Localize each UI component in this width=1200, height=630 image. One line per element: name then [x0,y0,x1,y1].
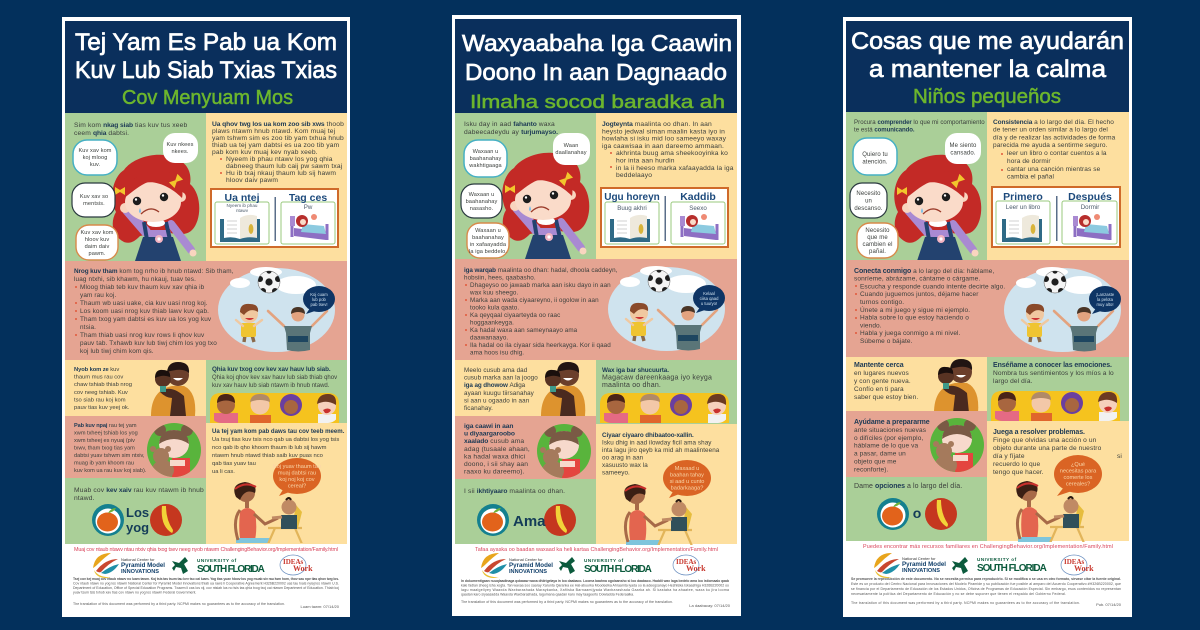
panel: understand behaviour: te está comunicando. [854,127,914,134]
panel: emotions: maalinta oo dhan. [602,382,661,389]
panel: consistency: leer un libro o contar cuentos a la [1007,150,1107,157]
footer: links, logos, credits: lagu maalgeliyey Waaxda Waxbarashada Maraykanka, Xafiiska Barnaamijyada Waxbarashada Gaarka ah. Si kastaba ha ahaatee, waxa ku jira looma [461,588,729,592]
panel: consistency: hora de dormir [1007,158,1051,165]
panel: connect: muy alto! [1096,302,1114,307]
panel: connect: ciisa qaad [700,296,719,301]
panel: understand behaviour: nasasho. [470,206,494,212]
panel: choices [65,478,206,544]
footer: links, logos, credits: La daabacay: 07/14/20 [689,603,731,608]
panel: problem solving: si [1117,453,1122,460]
panel: emotions [206,360,347,425]
footer: links, logos, credits: Tsej cov kej muaj cov ntaub ntawv no luam tawm. Koj tsis tas tsum tau kev tso cai luam. Yog tias yuav hloov los yog muab siv rau lwm hom, thov sau npe tias qhov twg los. [73,577,339,581]
panel: emotions: Magacaw dareenkaaga iyo keyga [602,374,712,382]
panel: stay close: ficanahay. [464,405,493,412]
footer: links, logos, credits: SOUTH FLORIDA [977,563,1047,574]
panel: problem solving: cereales? [1066,482,1090,488]
panel: connect: Tham thiab uasi nrog kuv rows li qhov kuv [80,332,205,339]
panel: connect: Escucha y responde cuando intente decirte algo. [860,283,1005,290]
schedule card: Ugu horeyn [604,192,660,203]
footer: links, logos, credits: SOUTH FLORIDA [584,564,652,575]
panel: connect: luag ntxhi, sib khawm, hu nkauj, tuav tes. [74,276,196,283]
panel: understand behaviour: dabeecadeydu ay turjumayso. [464,129,558,136]
panel: stay close [846,357,987,413]
footer: links, logos, credits: UNIVERSITY of [584,558,624,563]
footer: links, logos, credits: National Center for [121,557,155,562]
panel: stay close: cov neeg tshiab. Kuv [74,390,128,396]
panel: consistency: cambia el pañal [1007,174,1054,180]
panel: consistency: Hu ib txaj nkauj thaum lub sij hawm [226,170,336,177]
panel: consistency: hloov daiv pawm [226,177,278,184]
footer: links, logos, credits: Se promueve la reproducción de este documento. No se necesita permiso para reproducirlo. Si se modifica o se usa en otro formato, sírvase citar la fuente original. [851,577,1121,581]
panel: consistency: in la ii heeso marka xafaayadda la iga [616,165,734,172]
schedule card: Ua ntej [224,192,260,204]
panel: understand behaviour: Waan [564,143,578,149]
panel: connect: Habla sobre lo que estoy haciendo o [860,315,969,322]
panel: connect: Súbeme o bájate. [860,338,913,345]
footer: links, logos, credits: Luam tawm: 07/14/20 [301,604,340,609]
footer: links, logos, credits: UNIVERSITY of [977,557,1017,562]
footer: links, logos, credits: kale fadlan sheeg isha xogta. Tan waxaa soo saaray Xarunta Qaranka ee Hal-abuurka Moodeelka Ahraamta iyada oo la adeegsanayo Heshiiska Iskaashiga H326B220002 oo [461,584,729,588]
panel: problem solving [206,423,347,544]
panel: prepare me [846,411,987,477]
panel: understand behaviour: cansado. [950,150,976,156]
panel: connect: ntsia. [80,324,96,331]
panel: prepare me [65,416,206,480]
panel: understand behaviour: un [865,198,872,204]
panel: consistency: plaws ntawm hnub ntawd. Kom muaj tej [212,128,336,135]
header: Hmong title [65,21,347,113]
panel: consistency: akhrinta buug ama sheekooyinka ko [616,150,728,157]
schedule card: Leer un libro [1006,204,1041,211]
panel: connect [455,259,737,360]
panel: connect: yam rau koj. [80,292,116,299]
panel: problem solving: Koj yuav thaum tau [273,464,321,470]
panel: understand behaviour: Procura comprender lo que mi comportamiento [854,119,985,126]
header: Somali title [455,19,737,113]
panel: stay close: chaw tshiab thiab nrog [74,382,132,388]
panel: problem solving: Finge que olvidas una acción o un [993,437,1097,444]
panel: connect: lub pob [312,297,327,302]
panel: problem solving: cereal? [288,484,306,490]
panel: consistency: iga caawisaa in aan dareemo ammaan. [602,143,724,150]
panel: emotions: Nombra tus sentimientos y los míos a lo [993,370,1114,377]
panel: connect: Mloog thiab teb kuv thaum kuv xav qhia ib [80,284,205,291]
panel: problem solving: día y fíjate [993,453,1025,460]
panel: connect: hobsiin, hees, qaabasho. [464,274,536,282]
panel: problem solving: baahan tahay [670,472,704,478]
panel: choices: o [913,505,921,521]
panel: choices: Los [126,505,149,520]
footer: links, logos, credits: The translation of this document was performed by a third party. NCPMI makes no guarantees as to the accuracy of the translation. [851,601,1080,605]
panel: connect: sonríeme, abrázame, cántame o cárgame. [854,276,980,283]
panel: prepare me: Ayúdame a prepararme [854,419,930,426]
panel: connect: pauv tab. Txhawb kuv lub tiwj chim los yog txo [80,340,217,347]
panel: consistency [987,112,1129,260]
panel: problem solving: ¿Qué [1071,462,1085,468]
panel: prepare me: doono, i sii shay aan [464,461,528,468]
panel: connect: Ka hadal waxa aan sameynaayo ama [470,327,578,334]
footer: links, logos, credits: UNIVERSITY of [197,558,237,563]
panel: emotions [987,357,1129,423]
panel: connect: Koj cuam [310,292,328,297]
panel: understand behaviour: koj mloog [83,155,107,161]
panel: consistency: día y de realizar las actividades de forma [993,134,1116,141]
footer: links, logos, credits: Pyramid Model [902,561,946,568]
panel: emotions: largo del día. [993,378,1033,385]
panel: connect: Marka aan wada ciyaareyno, ii ogolow in aan [470,297,599,304]
panel: consistency [596,113,737,259]
panel: stay close: ayaan kuugu tiirsanahay [464,390,535,397]
panel: connect: pab tsev! [310,302,328,307]
panel: consistency: cantar una canción mientras se [1007,166,1101,173]
panel: prepare me: xwm txheej es nyuaj (piv [74,438,135,444]
panel: choices: yog [126,520,149,535]
panel: problem solving: comerte los [1064,475,1093,481]
panel: prepare me: adag (tusaale ahaan, [464,446,530,453]
panel: emotions: Wax iga bar shucuurta. [602,367,669,374]
panel: connect: iga warqab maalinta oo dhan: hadal, dhoola caddeyn, [464,267,617,274]
panel: understand behaviour [65,113,206,261]
panel: understand behaviour: que me [867,235,888,241]
panel: connect: Conecta conmigo a lo largo del día: háblame, [854,268,994,275]
footer: links, logos, credits: Muaj cov ntaub ntawv ntau ntxiv qhia txog tsev neeg nyob ntawm ChallengingBehavior.org/Implementation/Family.html [74,547,338,553]
panel: choices: ntawd. [74,495,95,502]
panel: prepare me: raaxo ku dareemo). [464,469,525,476]
panel: understand behaviour: Waxaan u [475,228,501,234]
panel: consistency: Nyeem ib phau ntawv los yog qhia [226,156,333,163]
panel: connect: ama hoos isu dhig. [470,350,524,356]
schedule card: Tag ces [289,192,327,204]
panel: understand behaviour: kuv. [90,162,100,168]
footer: links, logos, credits: Tafaa ayaska oo baadan waxaad ka heli kartaa ChallengingBehavior.org/Implementation/Family.html [475,547,718,553]
header: Somali title: Waxyaabaha Iga Caawin [462,30,732,56]
panel: problem solving: xasuusto wax la [602,462,648,469]
panel: connect [846,260,1129,357]
panel: stay close: cusub marka aan la joogo [464,375,538,382]
panel: connect: la pelota [1097,297,1114,302]
panel: stay close: Confío en ti para [854,386,904,393]
panel: problem solving [596,424,737,546]
panel: problem solving: ntawm hnub ntawd thiab saib kuv puas nco [212,453,323,459]
panel: stay close: Meelo cusub ama dad [464,367,527,374]
schedule card: ntawv [236,208,249,213]
panel: problem solving: qab tias yuav tau [212,461,256,467]
panel: consistency: yam tshwm sim es zoo tib yam txhua hnub [212,135,344,142]
panel: problem solving: Ua txuj tias kuv tsis nco qab ua dabtsi los yog tsis [212,437,339,443]
panel: understand behaviour: pawm. [89,251,106,257]
panel: connect: Ka qeyqaal ciyaarteyda oo raac [470,312,560,319]
footer: links, logos, credits: National Center for [902,556,936,561]
poster: Spanish [843,17,1132,617]
panel: problem solving: recuerdo lo que [993,461,1041,468]
panel: stay close: iga ag dhowow Adiga [464,382,525,389]
panel: prepare me: o difíciles (por ejemplo, [854,435,923,442]
footer: links, logos, credits: Work [1074,564,1094,573]
footer: links, logos, credits: INNOVATIONS [121,569,159,575]
panel: connect: turnos contigo. [860,299,904,306]
footer: links, logos, credits: yuav tsum tsis txhob xav tias cov ntawv no yog los ntawm Federal Government. [73,590,196,594]
panel: stay close: thaum mus rau cov [74,375,123,381]
footer: links, logos, credits: Department of Education, Office of Special Education Programs. Txawm li cas los xij, cov ntsiab lus no tsis tas qhia txog txoj cai ntawm Department of Education. Thiab koj [73,586,339,590]
panel: understand behaviour: pañal. [869,249,886,255]
panel: prepare me: u diyaargaroobo [464,431,515,438]
panel: problem solving: inta lagu jiro qeyb ka mid ah maalinteena [602,447,720,454]
panel: connect: Tham txog yam dabtsi es kuv ua los yog kuv [80,316,212,323]
header: Spanish title [846,21,1129,112]
panel: stay close: si aan u ogaado in aan [464,397,530,404]
panel: consistency: dabneeg thaum lub caij pw sawm txaj [226,163,343,170]
panel: prepare me: dabtsi yuav tshwm sim ntxiv, [74,453,145,459]
panel: prepare me [455,416,596,481]
panel: connect: viendo. [860,322,882,329]
panel: connect: Dhageyso oo jawaab marka aan isku dayo in aan [470,282,611,289]
panel: understand behaviour: cambien el [862,242,893,248]
schedule card: Seexo [689,205,707,212]
panel: problem solving: koj noj koj cov [279,477,315,483]
panel: problem solving: si aad u cunto [670,479,704,485]
panel: consistency: thiab ua tej yam dabtsi es ua zoo tib yam [212,142,340,149]
schedule card: Buug akhri [617,205,647,212]
panel: consistency: heysto jedwal siman maalin kasta iyo in [602,128,725,135]
panel: problem solving: necesitas para [1060,468,1097,474]
footer: links, logos, credits: IDEAs [283,558,304,566]
panel: problem solving: Isku dhig in aad ilowday ficil ama shay [602,440,712,446]
panel: connect [65,261,347,360]
schedule card: Nyeem ib phau [227,203,257,208]
schedule card: Pw [304,204,313,211]
panel: emotions: Qhia kuv txog cov kev xav hauv lub siab. [212,366,331,373]
footer: links, logos, credits: Work [293,564,313,573]
panel: understand behaviour [846,112,987,261]
panel: consistency: howlaha si isku mid loo sameeyo waxay [602,136,727,143]
panel: emotions: Qhia koj qhov kev xav hauv lub siab thiab qhov [212,375,337,381]
footer: links, logos, credits: INNOVATIONS [509,569,547,575]
footer: links, logos, credits [461,547,731,608]
footer: links, logos, credits: se financia por el Departamento de Educación de los Estados Unidos, Oficina de Programas de Educación Especial. Sin embargo, esos contenidos no representan [851,587,1121,591]
panel: consistency: Jogteynta maalinta oo dhan. In aan [602,121,712,128]
panel: problem solving: Juega a resolver problemas. [993,429,1085,436]
panel: understand behaviour: atención. [862,160,888,166]
panel: prepare me: ante situaciones nuevas [854,427,927,434]
panel: emotions [596,360,737,425]
panel: consistency: de tener un orden similar a lo largo del [993,127,1108,134]
footer: links, logos, credits: INNOVATIONS [902,568,940,574]
panel: connect: ¡Lanzaste [1096,292,1114,297]
panel: stay close: y con gente nueva. [854,378,911,385]
poster: Somali [452,15,741,616]
panel: problem solving: Maxaad u [675,466,699,472]
panel: stay close: en lugares nuevos [854,370,909,377]
panel: prepare me: Pab kuv npaj rau tej yam [74,423,137,429]
panel: problem solving [987,421,1129,543]
panel: prepare me: háblame de lo que va [854,443,918,450]
header: Spanish title: a mantener la calma [869,56,1107,83]
schedule card [601,188,728,247]
panel: problem solving: Ciyaar ciyaaro dhibaatoo-xallin. [602,432,694,439]
panel: stay close [65,360,206,416]
panel: prepare me: a pasar, dame un [854,451,906,458]
panel: choices [846,477,987,541]
panel: choices: Muab cov kev xaiv rau kuv ntawm ib hnub [74,487,204,494]
footer: links, logos, credits: SOUTH FLORIDA [197,564,265,575]
panel: prepare me: txwv, tham txog tias yam [74,446,135,452]
panel: consistency: pab kom kuv muaj kev nyab xeeb. [212,149,318,156]
panel: connect: u tuuryo! [701,301,717,306]
panel: prepare me: xaalado cusub ama [464,438,524,445]
header: Spanish title: Cosas que me ayudarán [851,28,1124,55]
panel: understand behaviour: baahanahay [470,156,502,162]
panel: connect: Ila hadal oo ila ciyaar sida heerkayga. Kor ii qaad [470,342,611,349]
panel: understand behaviour: baahanahay [472,235,504,241]
panel: connect: Los koom uasi nrog kuv thiab lawv kuv qab. [80,308,209,315]
schedule card: Dormir [1081,204,1099,211]
footer: links, logos, credits: The translation of this document was performed by a third party. NCPMI makes no guarantees as to the accuracy of the translation. [73,602,285,606]
panel: problem solving: nco qab ib qho khoom thaum ib lub sij hawm [212,445,327,451]
footer: links, logos, credits: qaadan karo siyaasadda Waaxda Waxbarashada, lagumana qaadan karo inay taageerto Dowladda Federaalka. [461,592,634,596]
panel: problem solving: Ua tej yam kom pab daws tau cov teeb meem. [212,428,345,435]
footer: links, logos, credits: The translation of this document was performed by a third party. NCPMI makes no guarantees as to the accuracy of the translation. [461,600,673,604]
panel: understand behaviour: daim daiv [85,244,110,250]
schedule card: Después [1068,191,1112,203]
panel: stay close: Nyob kom ze kuv [74,367,119,373]
panel: choices [455,479,596,544]
schedule card [211,189,338,247]
panel: prepare me: ka hadal waxa dhici [464,453,526,460]
footer: links, logos, credits: Pyramid Model [121,562,165,569]
panel: understand behaviour: descanso. [854,206,883,212]
panel: connect: Habla y juega conmigo a mi nivel. [860,330,961,337]
panel: consistency: beddelaayo [616,172,652,179]
panel: connect: Kelaal [703,291,715,296]
panel: choices: I sii ikhtiyaaro maalinta oo dhan. [464,488,565,495]
schedule card [992,187,1120,247]
panel: consistency: Ua qhov twg los ua kom zoo sib xws thoob [212,121,344,128]
panel: understand behaviour: Necesito [856,191,881,197]
panel: understand behaviour: wakhtigaaga [468,163,503,169]
panel: emotions: Enséñame a conocer las emociones. [993,362,1112,369]
panel: connect: koj lub tiwj chim kom qis. [80,348,154,355]
header: Hmong title: Cov Menyuam Mos [122,87,293,109]
header: Hmong title: Tej Yam Es Pab ua Kom [75,29,337,56]
footer: links, logos, credits: IDEAs [1064,558,1085,566]
panel: understand behaviour: Isku day in aad fahanto waxa [464,121,555,128]
panel: connect: daawanaayo. [470,334,508,342]
footer: links, logos, credits: Este es un producto del Centro Nacional para Innovaciones del Modelo Piramide y su publicación fue posible al amparo del Acuerdo Cooperativo #H326B220002, que [851,582,1121,586]
panel: consistency: Consistencia a lo largo del día. El hecho [993,119,1114,126]
header: Hmong title: Kuv Lub Siab Txias Txias [75,57,337,84]
panel: understand behaviour: Waxaan u [473,149,498,155]
panel: consistency: parecida me ayuda a sentirme seguro. [993,142,1108,149]
panel: understand behaviour: la iga beddelo. [469,249,507,255]
panel: emotions: kuv xav hauv lub siab ntawm ib hnub ntawd. [212,383,330,389]
schedule card: Primero [1003,191,1043,203]
panel: understand behaviour: Waxaan u [469,192,494,198]
panel: connect: Nrog kuv tham kom tog nrho ib hnub ntawd: Sib tham, [74,268,234,275]
panel: understand behaviour: Kuv xav kom [80,230,114,236]
panel: prepare me: kuv kom ua rau kuv koj siab). [74,468,147,474]
footer: links, logos, credits: Pyramid Model [509,562,553,569]
panel: stay close: tso siab rau koj kom [74,397,126,403]
panel: understand behaviour: Kuv nkees [166,142,194,148]
footer: links, logos, credits: Cov ntaub ntawv no yog los ntawm National Center for Pyramid Model Innovations thiab ua raws li Cooperative Agreement H326B220002 uas tau txais nyiaj los ntawm U.S. [73,582,339,586]
panel: understand behaviour [455,113,596,259]
panel: understand behaviour: daallanahay [555,150,587,156]
header: Somali title: Ilmaha socod baradka ah [470,92,725,112]
panel: connect: Thaum wb uasi uake, cia kuv uasi nrog koj. [80,300,208,307]
footer: links, logos, credits: IDEAs [676,558,697,566]
panel: stay close [455,360,596,416]
panel: connect: tooko kula qaato. [470,304,519,312]
panel: problem solving: oo arag in aan [602,454,644,462]
panel: understand behaviour: in xafaayadda [470,242,507,248]
panel: prepare me: reconforte). [854,466,889,473]
panel: problem solving: muaj dabtsi rau [278,470,316,476]
panel: understand behaviour: Necesito [865,228,890,234]
panel: connect: Únete a mi juego y sigue mi ejemplo. [860,305,970,314]
panel: problem solving: tengo que hacer. [993,469,1044,476]
footer: links, logos, credits [851,544,1122,607]
panel: understand behaviour: Sim kom nkag siab tias kuv tus xeeb [74,122,187,129]
panel: problem solving: ua li cas. [212,469,235,475]
footer: links, logos, credits: necesariamente la política del Departamento de Educación y no se debe suponer que tienen el respaldo del Gobierno Federal. [851,592,1066,596]
panel: understand behaviour: hloov kuv [85,237,109,243]
panel: understand behaviour: ceem qhia dabtsi. [74,130,129,137]
panel: understand behaviour: Kuv xav kom [78,148,112,154]
footer: links, logos, credits: Puedes encontrar más recursos familiares en ChallengingBehavior.org/Implementation/Family.html [863,544,1113,550]
panel: problem solving: sameeyo. [602,470,630,476]
panel: problem solving: badarkaaga? [671,486,703,492]
panel: prepare me: xwm txheej tshiab los yog [74,430,138,436]
panel: understand behaviour: baahanahay [466,199,498,205]
panel: problem solving: objeto durante una parte de nuestro [993,445,1102,452]
panel: connect: hoggaankeyga. [470,320,514,326]
panel: choices: Dame opciones a lo largo del día. [854,483,962,490]
panel: stay close: saber que estoy bien. [854,394,918,401]
header: Somali title: Doono In aan Dagnaado [465,59,727,85]
panel: stay close: Mantente cerca [854,362,904,369]
footer: links, logos, credits: Work [686,564,706,573]
panel: prepare me: iga caawi in aan [464,423,513,430]
footer: links, logos, credits: Pub. 07/14/20 [1096,602,1122,607]
panel: prepare me: objeto que me [854,458,897,466]
footer: links, logos, credits: National Center for [509,557,543,562]
footer: links, logos, credits: In dokumentigaan nuuqlaadinaga qolaaaw waxa dhiirigelaya in loo daabaco. Looma baahna ogolaansho si loo daabaco. Haddii wax laga bedelo ama loo isticmaalo qaab [461,579,729,583]
panel: consistency: hor inta aan hurdin [616,158,675,164]
panel: consistency [206,113,347,261]
panel: connect: Cuando juguemos juntos, déjame hacer [860,291,979,298]
footer: links, logos, credits [73,547,340,609]
panel: understand behaviour: mentsis. [83,201,105,207]
panel: understand behaviour: Me siento [950,143,976,149]
panel: stay close: pauv tias kuv yeej ok. [74,405,130,411]
header: Spanish title: Niños pequeños [913,86,1061,108]
schedule card: Kaddib [680,191,716,203]
panel: prepare me: muag ib yam khoom rau [74,460,134,466]
panel: understand behaviour: Quiero tu [862,152,888,158]
poster: Hmong [62,17,350,617]
panel: connect: wax kuu sheego. [469,290,518,296]
panel: choices: Ama [513,513,546,530]
panel: understand behaviour: nkees. [171,149,189,155]
panel: understand behaviour: Kuv xav so [80,194,108,200]
